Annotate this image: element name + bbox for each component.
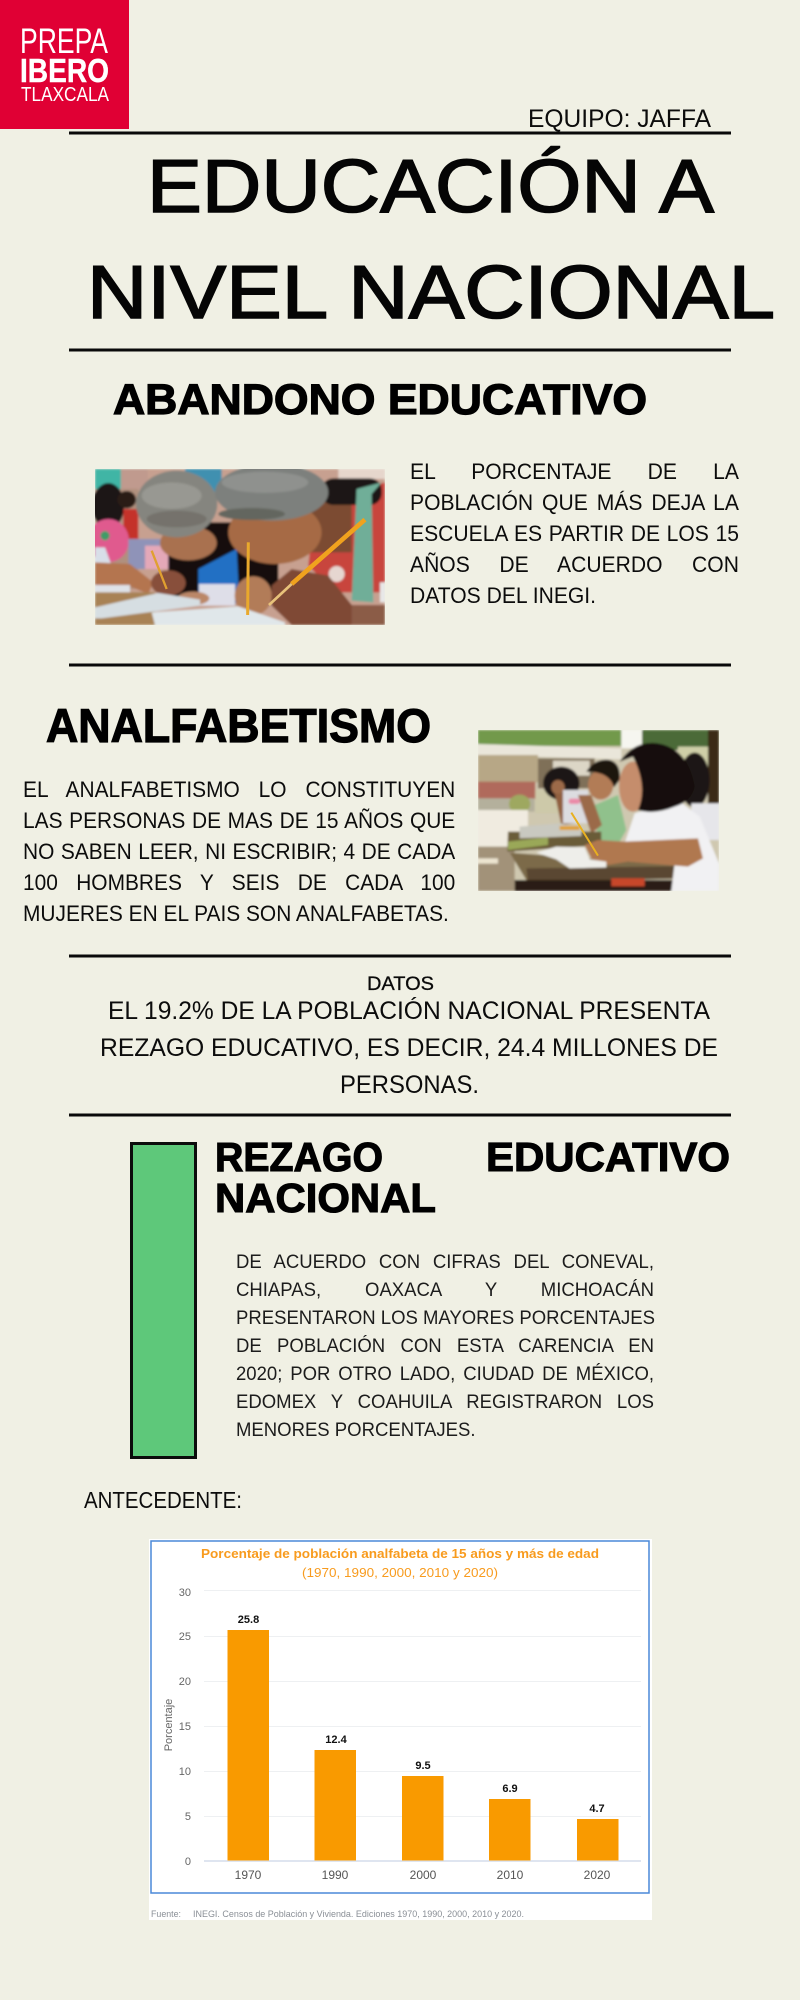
text: analfabetismo	[23, 774, 455, 934]
logo: Prepa Ibero Tlaxcala	[0, 0, 129, 129]
text: analfabetismo: EL ANALFABETISMO LO CONSTITUYEN	[23, 777, 455, 802]
photo: older women writing in notebooks	[88, 464, 385, 625]
text: rezago: CHIAPAS, OAXACA Y MICHOACÁN	[236, 1279, 654, 1301]
value labels	[238, 1614, 605, 1815]
source note: Fuente:	[151, 1909, 181, 1920]
text: abandono	[410, 456, 739, 616]
x axis labels: 2020	[584, 1868, 611, 1882]
logo: Prepa Ibero Tlaxcala: TLAXCALA	[21, 84, 110, 106]
text: abandono: ESCUELA ES PARTIR DE LOS 15	[410, 521, 739, 546]
text: abandono: AÑOS DE ACUERDO CON	[410, 552, 739, 577]
text: rezago: PRESENTARON LOS MAYORES PORCENTAJES	[236, 1307, 655, 1329]
heading: analfabetismo: ANALFABETISMO	[46, 699, 431, 752]
chart title: (1970, 1990, 2000, 2010 y 2020)	[302, 1566, 498, 1580]
y axis labels: 0	[185, 1856, 191, 1868]
text: rezago	[236, 1248, 654, 1448]
text: datos: EL 19.2% DE LA POBLACIÓN NACIONAL PRESENTA	[108, 996, 710, 1025]
x axis labels	[235, 1868, 611, 1882]
heading: datos: DATOS	[367, 973, 434, 995]
text: datos	[100, 996, 718, 1099]
photo: children at school desks	[478, 730, 719, 891]
panel: datos	[100, 973, 718, 1099]
y axis labels: 5	[185, 1811, 191, 1823]
heading: rezago educativo nacional: EDUCATIVO	[486, 1134, 730, 1180]
heading: rezago educativo nacional	[215, 1134, 730, 1221]
x axis labels: 2010	[497, 1868, 524, 1882]
panel: analfabetismo	[23, 699, 719, 934]
y axis labels: 15	[179, 1721, 191, 1733]
y axis labels: 30	[179, 1587, 191, 1599]
text: analfabetismo: 100 HOMBRES Y SEIS DE CADA 100	[23, 870, 455, 895]
label: antecedente: ANTECEDENTE:	[84, 1487, 242, 1513]
x axis labels: 2000	[410, 1868, 437, 1882]
title	[87, 144, 775, 334]
text: analfabetismo: NO SABEN LEER, NI ESCRIBIR; 4 DE CADA	[23, 839, 455, 864]
value labels: 4.7	[589, 1803, 605, 1815]
bars	[228, 1630, 618, 1860]
chart title	[201, 1547, 599, 1580]
value labels: 9.5	[415, 1760, 431, 1772]
text: rezago: MENORES PORCENTAJES.	[236, 1419, 475, 1441]
text: datos: REZAGO EDUCATIVO, ES DECIR, 24.4 MILLONES DE	[100, 1034, 718, 1062]
y axis labels: 10	[179, 1766, 191, 1778]
value labels: 6.9	[502, 1783, 518, 1795]
text: abandono: EL PORCENTAJE DE LA	[410, 459, 739, 484]
team label: EQUIPO: JAFFA	[528, 105, 711, 133]
x axis labels: 1970	[235, 1868, 262, 1882]
heading: abandono educativo: ABANDONO EDUCATIVO	[113, 376, 647, 424]
y axis title: Porcentaje	[163, 1699, 175, 1751]
text: analfabetismo: LAS PERSONAS DE MAS DE 15 AÑOS QUE	[23, 808, 455, 833]
text: analfabetismo: MUJERES EN EL PAIS SON ANALFABETAS.	[23, 901, 449, 926]
chart title: Porcentaje de población analfabeta de 15 años y más de edad	[201, 1547, 599, 1561]
text: rezago: DE POBLACIÓN CON ESTA CARENCIA EN	[236, 1335, 654, 1357]
panel: abandono educativo	[88, 376, 739, 625]
bar chart: porcentaje de población analfabeta	[149, 1539, 652, 1920]
heading: rezago educativo nacional: REZAGO	[215, 1134, 383, 1180]
text: datos: PERSONAS.	[340, 1071, 479, 1099]
text: rezago: 2020; POR OTRO LADO, CIUDAD DE MÉXICO,	[236, 1363, 654, 1385]
title: EDUCACIÓN A	[147, 144, 714, 228]
green accent bar	[132, 1144, 196, 1458]
logo: Prepa Ibero Tlaxcala: IBERO	[20, 52, 109, 89]
source note: INEGI. Censos de Población y Vivienda. Ediciones 1970, 1990, 2000, 2010 y 2020.	[193, 1909, 524, 1920]
y axis labels: 25	[179, 1631, 191, 1643]
x axis labels: 1990	[322, 1868, 349, 1882]
y axis labels	[179, 1587, 191, 1868]
value labels: 12.4	[325, 1734, 348, 1746]
text: rezago: EDOMEX Y COAHUILA REGISTRARON LOS	[236, 1391, 654, 1413]
logo: Prepa Ibero Tlaxcala: PREPA	[20, 22, 108, 61]
y axis labels: 20	[179, 1676, 191, 1688]
text: abandono: POBLACIÓN QUE MÁS DEJA LA	[410, 490, 739, 515]
text: abandono: DATOS DEL INEGI.	[410, 583, 596, 608]
title: NIVEL NACIONAL	[87, 250, 775, 334]
heading: rezago educativo nacional: NACIONAL	[215, 1175, 436, 1221]
text: rezago: DE ACUERDO CON CIFRAS DEL CONEVAL,	[236, 1251, 654, 1273]
panel: rezago educativo nacional	[132, 1134, 730, 1458]
value labels: 25.8	[238, 1614, 259, 1626]
